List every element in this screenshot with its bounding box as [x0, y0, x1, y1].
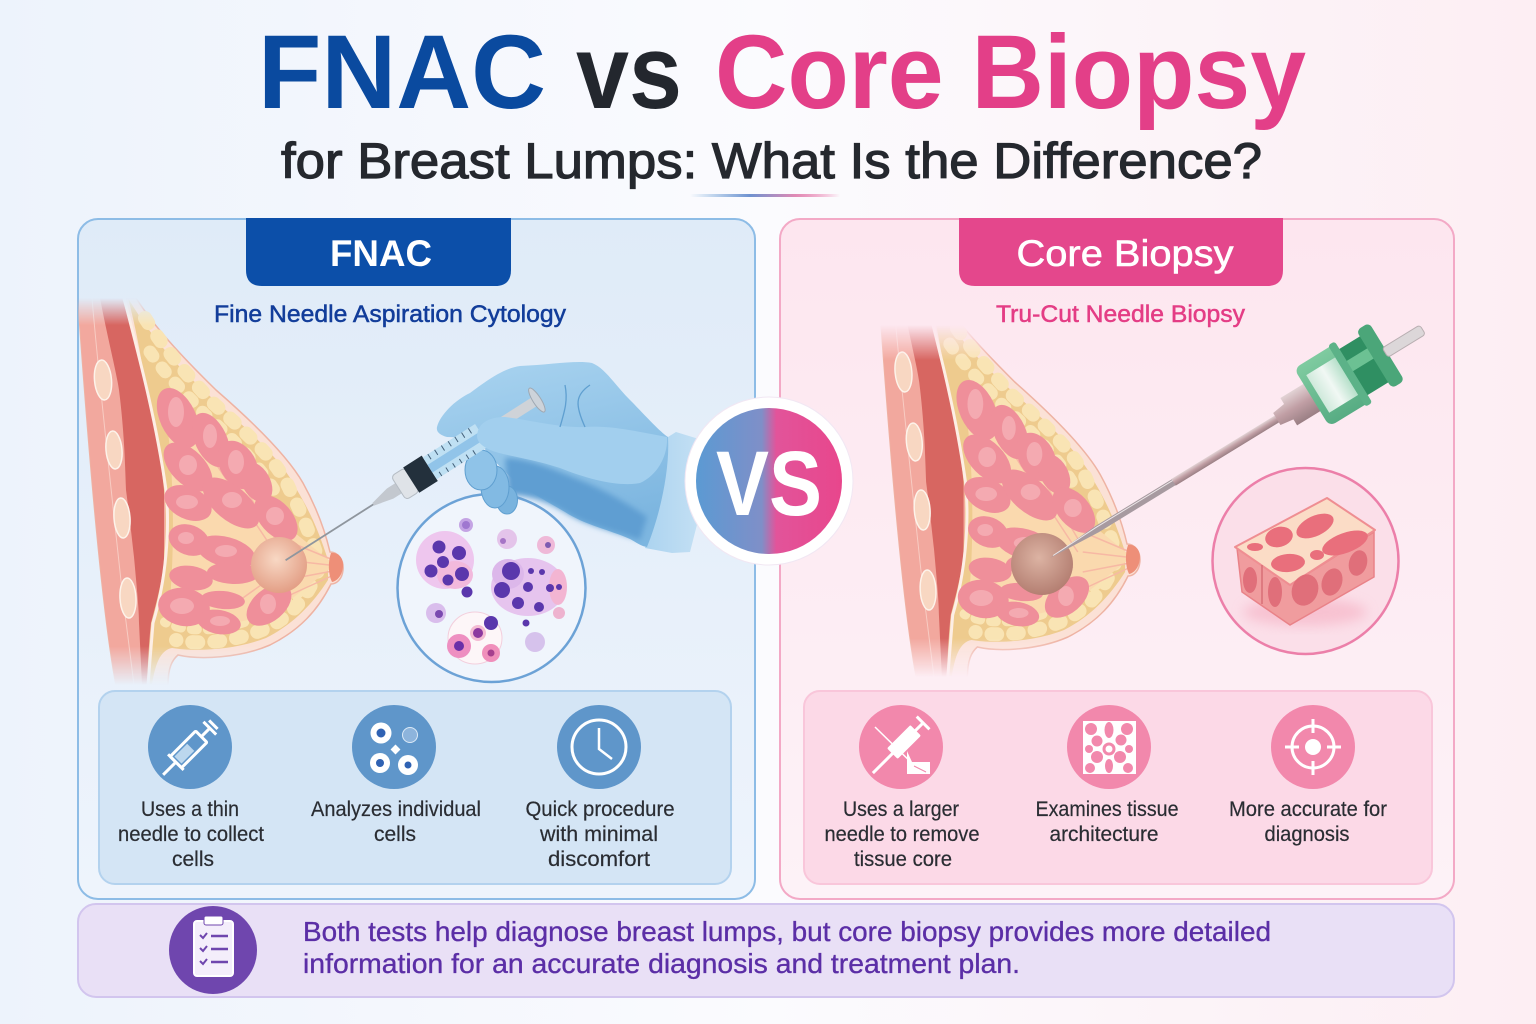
- text: analyzes individual cells: [311, 798, 481, 846]
- subtitle: for Breast Lumps: What Is the Difference?: [281, 133, 1262, 189]
- heading tab: FNAC: FNAC: [330, 233, 432, 274]
- text: examines tissue architecture: Examines tissue: [1036, 798, 1178, 821]
- bottom summary banner: [78, 904, 1454, 997]
- subheading: Fine Needle Aspiration Cytology: Fine Needle Aspiration Cytology: [214, 301, 566, 328]
- icon: syringe: [148, 705, 232, 789]
- text: quick procedure: with minimal: [539, 823, 658, 846]
- glove palm: [437, 362, 668, 547]
- hand in blue glove with syringe: [277, 362, 702, 573]
- feature strip: FNAC: [99, 691, 731, 884]
- text: examines tissue architecture: architecture: [1050, 823, 1158, 846]
- text: quick procedure: discomfort: [548, 848, 650, 871]
- panel: FNAC: [78, 218, 755, 899]
- icon: clock: [557, 705, 641, 789]
- icon: cells: [352, 705, 436, 789]
- text: examines tissue architecture: [1036, 798, 1178, 846]
- panel: Core Biopsy: [780, 218, 1454, 899]
- text: uses a thin needle: Uses a thin: [141, 798, 239, 821]
- breast anatomy illustration: [78, 298, 343, 685]
- icon: tissue architecture: [1067, 705, 1151, 789]
- text: uses a thin needle: needle to collect: [118, 823, 264, 846]
- glove thumb: [477, 417, 667, 484]
- tissue core circle: [1212, 468, 1398, 654]
- title: FNAC: [258, 14, 546, 131]
- lump: [1011, 533, 1073, 595]
- summary text: [303, 916, 1271, 979]
- title: [258, 14, 1306, 131]
- icon: larger needle: [859, 705, 943, 789]
- text: analyzes individual cells: cells: [374, 823, 416, 846]
- summary text: Both tests help diagnose breast lumps, but core biopsy provides more detailed: [303, 916, 1271, 947]
- VS badge: [685, 397, 853, 565]
- text: uses a larger needle: needle to remove: [824, 823, 980, 846]
- microscope circle: cells: [398, 494, 586, 682]
- text: quick procedure: Quick procedure: [526, 798, 674, 821]
- syringe: [277, 385, 548, 573]
- text: uses a thin needle: [118, 798, 264, 871]
- glove cuff: [645, 432, 702, 553]
- feature strip: Core Biopsy: [804, 691, 1432, 884]
- breast anatomy illustration: [881, 327, 1141, 675]
- text: uses a larger needle: [824, 798, 980, 871]
- text: more accurate: [1229, 798, 1387, 846]
- text: uses a larger needle: Uses a larger: [843, 798, 959, 821]
- text: quick procedure: [526, 798, 674, 871]
- summary text: information for an accurate diagnosis and treatment plan.: [303, 948, 1020, 979]
- title: vs: [576, 14, 682, 131]
- title: Core Biopsy: [715, 14, 1306, 131]
- text: analyzes individual cells: Analyzes individual: [311, 798, 481, 821]
- text: more accurate: diagnosis: [1264, 823, 1350, 846]
- text: more accurate: More accurate for: [1229, 798, 1387, 821]
- lower fingers: [465, 450, 518, 514]
- heading tab: Core Biopsy: [959, 218, 1283, 286]
- VS badge: VS: [716, 433, 822, 535]
- heading tab: FNAC: [246, 218, 511, 286]
- icon: target: [1271, 705, 1355, 789]
- subheading: Tru-Cut Needle Biopsy: Tru-Cut Needle Biopsy: [996, 301, 1245, 328]
- text: uses a larger needle: tissue core: [854, 848, 952, 871]
- core needle device: [1031, 299, 1441, 589]
- lump: [251, 537, 307, 593]
- text: uses a thin needle: cells: [172, 848, 214, 871]
- palm shadow: [505, 458, 647, 540]
- icon: clipboard: [169, 906, 257, 994]
- heading tab: Core Biopsy: Core Biopsy: [1016, 233, 1234, 274]
